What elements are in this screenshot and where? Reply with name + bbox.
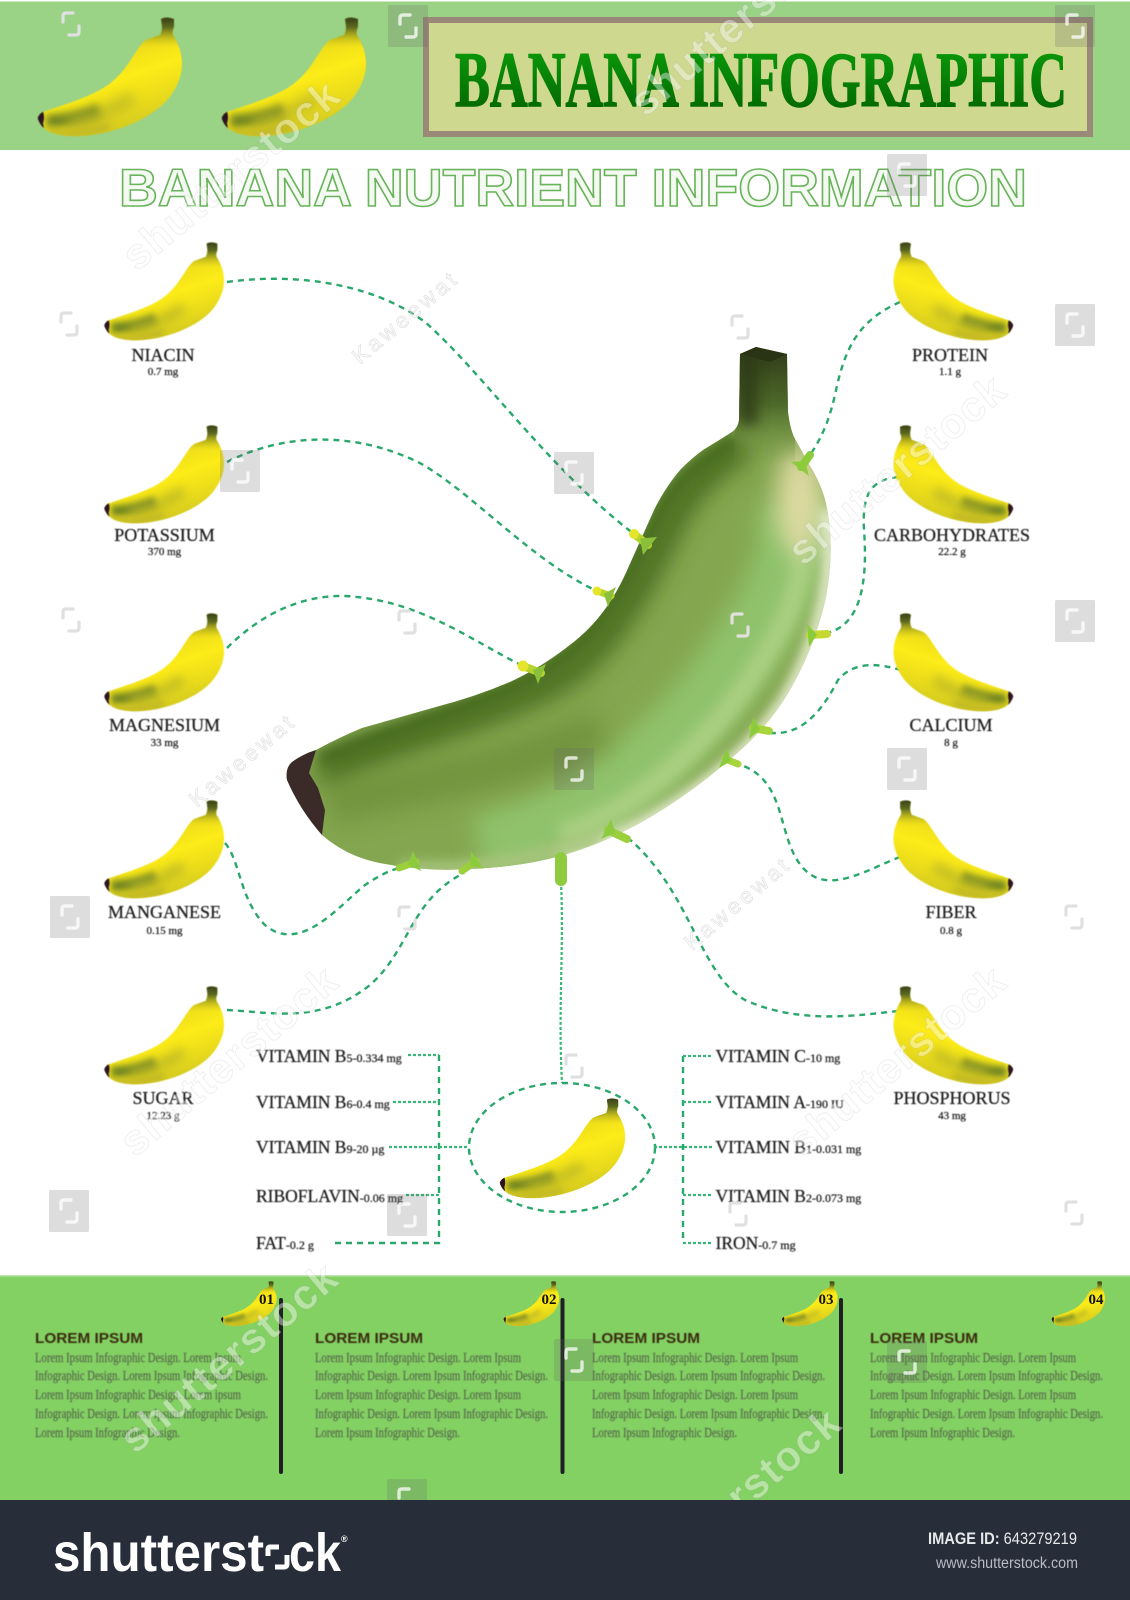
column 4: [870, 1280, 1106, 1440]
arrow pins: [399, 455, 827, 880]
text block: Lorem Ipsum Infographic Design.: [35, 1425, 180, 1440]
text block: Lorem Ipsum Infographic Design.: [592, 1425, 737, 1440]
right vitamin labels: VITAMIN C-10 mg: [716, 1046, 840, 1066]
right vitamin labels: [716, 1046, 861, 1253]
divider bar: [279, 1298, 283, 1474]
pin manganese: [399, 851, 421, 871]
text block: Infographic Design. Lorem Ipsum Infographic Design.: [35, 1368, 268, 1383]
column 3: [592, 1280, 843, 1474]
shutterstock logo: ®: [341, 1534, 348, 1544]
left vitamin labels: VITAMIN B6-0.4 mg: [256, 1092, 390, 1112]
text block: Lorem Ipsum Infographic Design. Lorem ipsum: [35, 1387, 241, 1402]
nutrient niacin: NIACIN: [132, 345, 194, 365]
watermark overlay: shutterstock: [113, 70, 349, 279]
line potassium: [227, 440, 597, 591]
text block: [315, 1330, 548, 1440]
right vitamin labels: VITAMIN B1-0.031 mg: [716, 1137, 861, 1157]
watermark overlay: Kaweewat: [347, 267, 461, 369]
divider bar: [839, 1298, 843, 1474]
right bracket: [654, 1056, 713, 1243]
nutrient sugar: SUGAR: [132, 1088, 194, 1108]
section heading: BANANA NUTRIENT INFORMATION: [119, 159, 1027, 218]
line protein: [810, 302, 900, 455]
banana 03: 03: [818, 1292, 834, 1308]
website: www.shutterstock.com: [935, 1555, 1078, 1572]
left bracket: [333, 1055, 469, 1243]
text block: [870, 1330, 1103, 1440]
nutrient phosphorus: [890, 984, 1015, 1122]
banana 01: [220, 1280, 278, 1327]
left vitamin labels: VITAMIN B9-20 µg: [256, 1137, 384, 1157]
nutrient phosphorus: 43 mg: [938, 1110, 966, 1122]
pin fiber: [719, 748, 738, 768]
pin carbohydrates: [807, 624, 827, 647]
bottom info band: [0, 1275, 1130, 1500]
ellipse with banana: [469, 1083, 655, 1212]
text block: Lorem Ipsum Infographic Design. Lorem Ipsum: [870, 1387, 1076, 1402]
left vitamin labels: RIBOFLAVIN-0.06 mg: [256, 1186, 403, 1206]
text block: Lorem Ipsum Infographic Design. Lorem Ipsum: [315, 1387, 521, 1402]
shutterstock logo: ck: [289, 1523, 342, 1583]
pin centre: [555, 858, 567, 880]
nutrient manganese: 0.15 mg: [146, 925, 183, 937]
stem top: [740, 347, 787, 362]
line sugar: [227, 873, 464, 1014]
pin phosphorus: [601, 819, 627, 839]
line fiber: [738, 764, 900, 880]
banana 04: 04: [1088, 1292, 1104, 1308]
nutrient carbohydrates: 22.2 g: [938, 546, 966, 558]
nutrient protein: PROTEIN: [912, 345, 988, 365]
header banana 1: [36, 15, 186, 139]
vitamin diagram: [256, 1046, 861, 1253]
nutrient magnesium: [103, 611, 227, 749]
right vitamin labels: IRON-0.7 mg: [716, 1233, 796, 1253]
text block: LOREM IPSUM: [592, 1330, 700, 1347]
watermark overlay: shutterstock: [779, 956, 1015, 1165]
nutrient manganese: MANGANESE: [108, 902, 221, 922]
text block: LOREM IPSUM: [870, 1330, 978, 1347]
banana 02: 02: [542, 1292, 556, 1308]
left vitamin labels: [256, 1046, 403, 1253]
line magnesium: [227, 596, 523, 666]
watermark overlay: Kaweewat: [679, 853, 793, 955]
nutrient carbohydrates: CARBOHYDRATES: [874, 525, 1030, 545]
title panel: [426, 20, 1090, 134]
nutrient fiber: FIBER: [925, 902, 977, 922]
shutterstock logo: shutterst: [53, 1523, 264, 1583]
line niacin: [227, 279, 634, 534]
nutrient protein: 1.1 g: [939, 366, 962, 378]
connector lines: [225, 279, 901, 1083]
text block: Infographic Design. Lorem Ipsum Infographic Design.: [592, 1368, 825, 1383]
text block: Lorem Ipsum Infographic Design.: [870, 1425, 1015, 1440]
nutrient fiber: 0.8 g: [940, 925, 962, 937]
pin magnesium: [518, 660, 546, 684]
line centre: [561, 882, 562, 1083]
nutrient sugar: 12.23 g: [146, 1110, 180, 1122]
nutrient sugar: [103, 984, 227, 1122]
text block: Lorem Ipsum Infographic Design.: [315, 1425, 460, 1440]
nutrient manganese: [103, 798, 227, 937]
watermark overlay: shutterstock: [779, 365, 1015, 574]
divider bar: [560, 1298, 564, 1474]
left vitamin labels: FAT-0.2 g: [256, 1233, 314, 1253]
pin potassium: [592, 586, 616, 607]
banana 03: [781, 1280, 839, 1327]
banana 02: [503, 1280, 561, 1327]
nutrient magnesium: 33 mg: [151, 737, 179, 749]
pin calcium: [749, 717, 769, 739]
nutrient calcium: CALCIUM: [909, 715, 993, 735]
right vitamin labels: VITAMIN B2-0.073 mg: [716, 1186, 861, 1206]
banana 04: [1051, 1280, 1106, 1327]
text block: Lorem Ipsum Infographic Design. Lorem Ipsum: [870, 1350, 1076, 1365]
text block: [35, 1330, 268, 1440]
footer bar: [0, 1500, 1130, 1600]
right vitamin labels: VITAMIN A-190 IU: [716, 1092, 844, 1112]
nutrient protein: [890, 240, 1015, 378]
column 2: [315, 1280, 564, 1474]
nutrient magnesium: MAGNESIUM: [109, 715, 220, 735]
line carbohydrates: [827, 477, 898, 633]
pin protein: [791, 455, 810, 476]
nutrient calcium: 8 g: [944, 737, 958, 749]
image id: IMAGE ID: 643279219: [928, 1530, 1077, 1548]
text block: LOREM IPSUM: [315, 1330, 423, 1347]
left vitamin labels: VITAMIN B5-0.334 mg: [256, 1046, 402, 1066]
text block: Lorem Ipsum Infographic Design. Lorem Ipsum: [315, 1350, 521, 1365]
nutrient carbohydrates: [874, 423, 1030, 558]
banana 01: 01: [259, 1292, 274, 1308]
header banner: [0, 2, 1130, 150]
nutrient potassium: 370 mg: [148, 546, 182, 558]
text block: Infographic Design. Lorem Ipsum Infographic Design.: [35, 1406, 268, 1421]
column 1: [35, 1280, 283, 1474]
header banana 2: [220, 15, 370, 139]
pin niacin: [629, 529, 657, 555]
nutrient fiber: [890, 798, 1015, 937]
line phosphorus: [628, 838, 898, 1016]
line calcium: [771, 665, 901, 733]
nutrient phosphorus: PHOSPHORUS: [893, 1088, 1011, 1108]
central green banana: [280, 340, 840, 880]
nutrient potassium: POTASSIUM: [114, 525, 215, 545]
line manganese: [225, 843, 400, 934]
text block: [592, 1330, 825, 1440]
nutrient calcium: [890, 611, 1015, 749]
text block: Lorem Ipsum Infographic Design. Lorem Ipsum: [592, 1387, 798, 1402]
text block: Lorem Ipsum Infographic Design. Lorem Ipsum: [592, 1350, 798, 1365]
text block: Infographic Design. Lorem Ipsum Infographic Design.: [592, 1406, 825, 1421]
text block: LOREM IPSUM: [35, 1330, 143, 1347]
text block: Infographic Design. Lorem Ipsum Infographic Design.: [315, 1406, 548, 1421]
nutrient potassium: [103, 423, 227, 558]
text block: Lorem Ipsum Infographic Design. Lorem Ipsum: [35, 1350, 241, 1365]
watermark overlay: shutterstock: [111, 1253, 347, 1462]
text block: Infographic Design. Lorem Ipsum Infographic Design.: [315, 1368, 548, 1383]
nutrient niacin: [103, 240, 227, 378]
nutrient niacin: 0.7 mg: [148, 366, 179, 378]
watermark overlay: Kaweewat: [184, 710, 298, 812]
dark blossom end: [287, 750, 325, 835]
pin sugar: [462, 851, 483, 871]
watermark overlay: shutterstock: [111, 956, 347, 1165]
